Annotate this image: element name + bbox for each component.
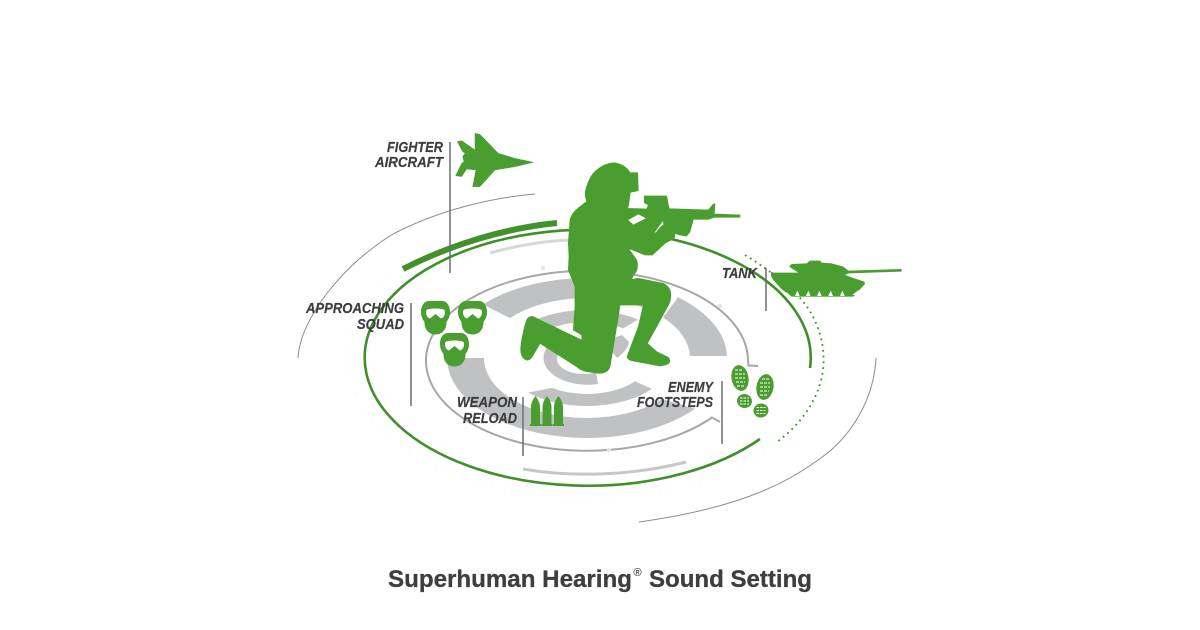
title: [388, 566, 812, 593]
icon: tank: [771, 261, 902, 297]
label: fighter aircraft: FIGHTER: [387, 140, 443, 156]
green thick arc: [403, 223, 557, 269]
inner gray ring: [426, 271, 758, 451]
outer band: top left segment: [483, 278, 672, 318]
middle band: bottom segment: [528, 381, 652, 406]
icon: bullets: [530, 396, 564, 426]
title: Superhuman Hearing: [388, 566, 632, 593]
light gray lower arc: [523, 462, 686, 474]
label: tank: TANK: [722, 266, 758, 282]
outer thin arc: upper left: [298, 194, 535, 358]
label: enemy footsteps: ENEMY: [668, 380, 714, 396]
outer thin arc: lower right: [639, 358, 876, 522]
middle band: top segment: [523, 310, 638, 334]
ring markers: [541, 266, 722, 452]
label: fighter aircraft: AIRCRAFT: [374, 155, 444, 171]
icon: soldier: [521, 163, 740, 373]
label leader lines: [411, 142, 766, 456]
icon: left boot print: [729, 364, 754, 410]
label: weapon reload: WEAPON: [457, 395, 517, 411]
dotted green arc: [745, 255, 824, 442]
inner band: left segment: [543, 337, 598, 385]
label: fighter aircraft: [374, 140, 444, 171]
icon: fighter aircraft: [456, 133, 533, 187]
light gray upper arc: [490, 240, 570, 253]
label: weapon reload: [457, 395, 517, 427]
icon: right boot print: [752, 373, 776, 419]
inner band: right segment: [610, 335, 629, 358]
concentric gray target bands: [447, 278, 727, 438]
label: enemy footsteps: FOOTSTEPS: [637, 395, 713, 411]
label: approaching squad: SQUAD: [357, 317, 404, 333]
icon: mask 3: [440, 333, 469, 366]
label: enemy footsteps: [637, 380, 714, 411]
outer band: lower segment: [447, 358, 695, 438]
green main ring: [365, 230, 811, 486]
icon: mask 2: [458, 301, 487, 334]
title: ®: [634, 567, 642, 579]
title: Sound Setting: [649, 566, 812, 593]
outer band: right segment: [663, 297, 727, 356]
icon: mask 1: [421, 301, 450, 334]
label: approaching squad: APPROACHING: [305, 301, 404, 317]
label: weapon reload: RELOAD: [463, 411, 517, 427]
label: approaching squad: [305, 301, 404, 333]
